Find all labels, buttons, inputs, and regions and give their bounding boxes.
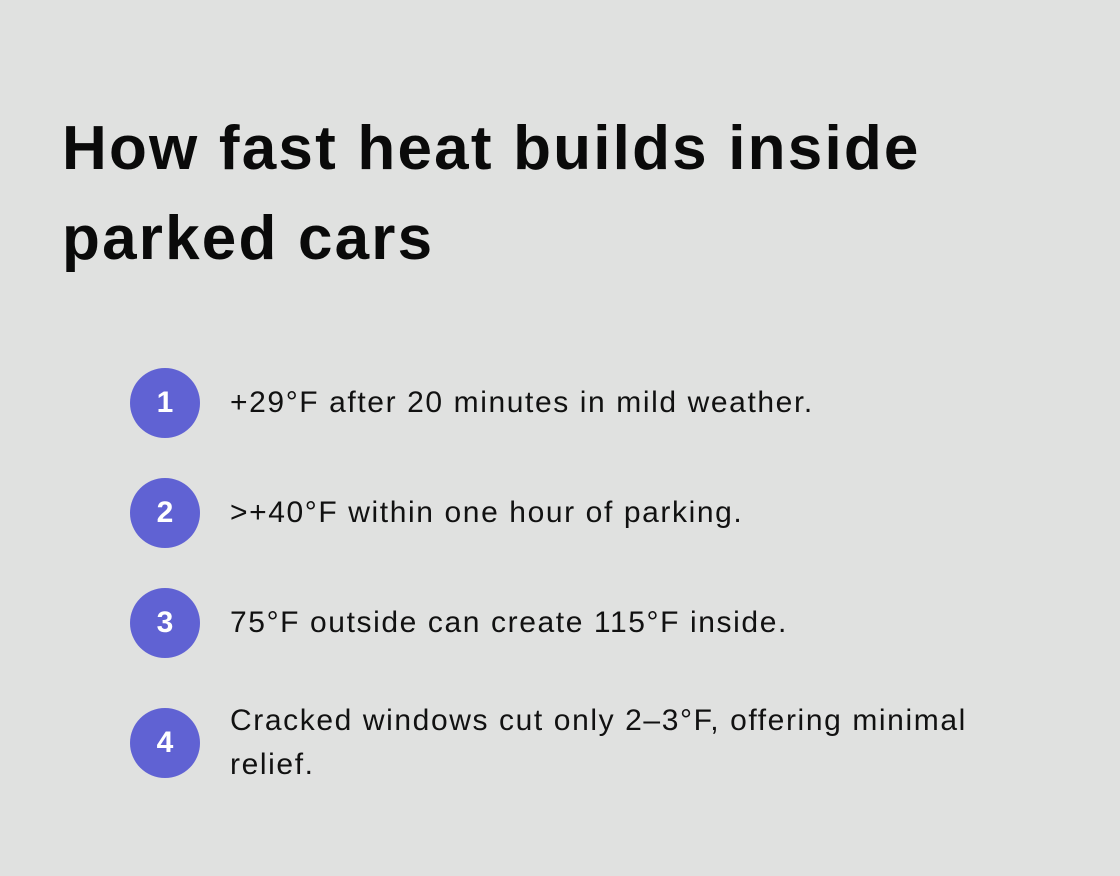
badge 4 — [130, 708, 200, 778]
list item 3 — [130, 588, 788, 658]
title: How fast heat builds inside — [62, 114, 921, 183]
badge 1: 1 — [157, 386, 173, 419]
title — [62, 114, 921, 273]
text 4: Cracked windows cut only 2–3°F, offering minimal relief. — [230, 704, 967, 781]
badge 2: 2 — [157, 496, 173, 529]
text 2: >+40°F within one hour of parking. — [230, 496, 743, 529]
list item 1 — [130, 368, 814, 438]
text 1: +29°F after 20 minutes in mild weather. — [230, 386, 814, 419]
badge 1 — [130, 368, 200, 438]
list item 2 — [130, 478, 743, 548]
text 3: 75°F outside can create 115°F inside. — [230, 606, 788, 639]
list item 4 — [130, 704, 967, 781]
title: parked cars — [62, 204, 434, 273]
badge 2 — [130, 478, 200, 548]
badge 4: 4 — [157, 726, 173, 759]
badge 3: 3 — [157, 606, 173, 639]
badge 3 — [130, 588, 200, 658]
